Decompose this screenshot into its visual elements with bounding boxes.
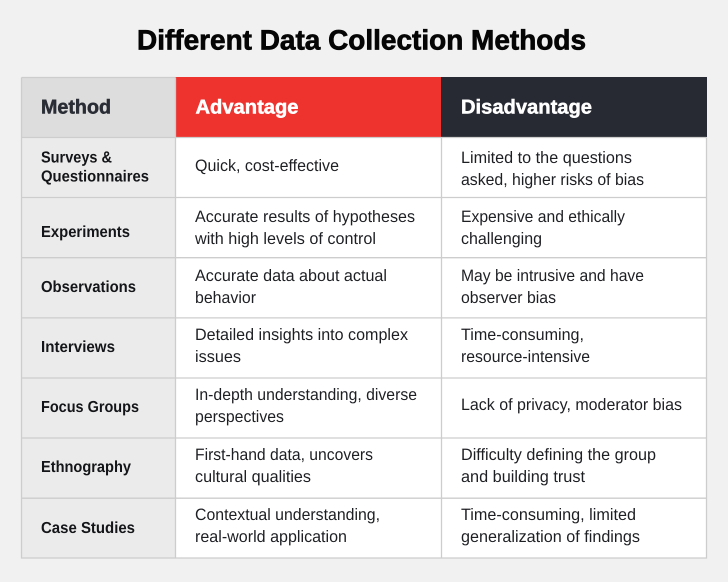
row: ethnography: First-hand data, uncovers bbox=[195, 446, 373, 464]
row: focus groups: perspectives bbox=[195, 408, 284, 426]
row: observations: May be intrusive and have bbox=[461, 267, 644, 285]
header: method: Method bbox=[41, 96, 111, 118]
row: surveys: asked, higher risks of bias bbox=[461, 171, 644, 189]
header: advantage: Advantage bbox=[196, 96, 298, 118]
row: interviews: Time-consuming, bbox=[461, 326, 584, 344]
header: disadvantage: Disadvantage bbox=[461, 96, 592, 118]
row: ethnography: Ethnography bbox=[41, 459, 131, 476]
header: method bbox=[22, 78, 176, 138]
row: observations: behavior bbox=[195, 289, 256, 307]
row: experiments: Expensive and ethically bbox=[461, 208, 626, 226]
row: ethnography: cultural qualities bbox=[195, 468, 311, 486]
row: focus groups bbox=[41, 386, 682, 426]
row: ethnography: and building trust bbox=[461, 468, 585, 486]
row: focus groups: Lack of privacy, moderator bias bbox=[461, 396, 682, 414]
table bbox=[22, 77, 707, 558]
row: experiments bbox=[41, 208, 626, 248]
row: case studies: real-world application bbox=[195, 528, 347, 546]
row: case studies: Contextual understanding, bbox=[195, 506, 380, 524]
row: interviews bbox=[41, 326, 590, 366]
row: case studies: Case Studies bbox=[41, 520, 135, 537]
row: surveys: Questionnaires bbox=[41, 168, 149, 186]
row: observations: Observations bbox=[41, 279, 136, 296]
row: observations: observer bias bbox=[461, 289, 556, 307]
row: observations bbox=[41, 267, 644, 307]
row: surveys: Quick, cost-effective bbox=[195, 157, 339, 175]
row: case studies: generalization of findings bbox=[461, 528, 640, 546]
row: case studies: Time-consuming, limited bbox=[461, 506, 636, 524]
title: Different Data Collection Methods bbox=[137, 24, 586, 56]
row: interviews: Interviews bbox=[41, 339, 115, 356]
row: interviews: resource-intensive bbox=[461, 348, 590, 366]
row: focus groups: In-depth understanding, diverse bbox=[195, 386, 417, 404]
row: interviews: Detailed insights into complex bbox=[195, 326, 409, 344]
row: experiments: Experiments bbox=[41, 224, 130, 241]
row: ethnography: Difficulty defining the group bbox=[461, 446, 656, 464]
row: surveys bbox=[41, 149, 644, 189]
row: experiments: with high levels of control bbox=[194, 230, 376, 248]
header: disadvantage bbox=[441, 77, 707, 137]
row: focus groups: Focus Groups bbox=[41, 399, 139, 416]
row: interviews: issues bbox=[195, 348, 241, 366]
row: experiments: challenging bbox=[461, 230, 542, 248]
row: case studies bbox=[41, 506, 640, 546]
row: ethnography bbox=[41, 446, 656, 486]
row: surveys: Surveys & bbox=[41, 150, 112, 166]
row: surveys: Limited to the questions bbox=[461, 149, 632, 167]
row: observations: Accurate data about actual bbox=[195, 267, 387, 285]
header: advantage bbox=[176, 77, 442, 137]
row: experiments: Accurate results of hypotheses bbox=[195, 208, 415, 226]
